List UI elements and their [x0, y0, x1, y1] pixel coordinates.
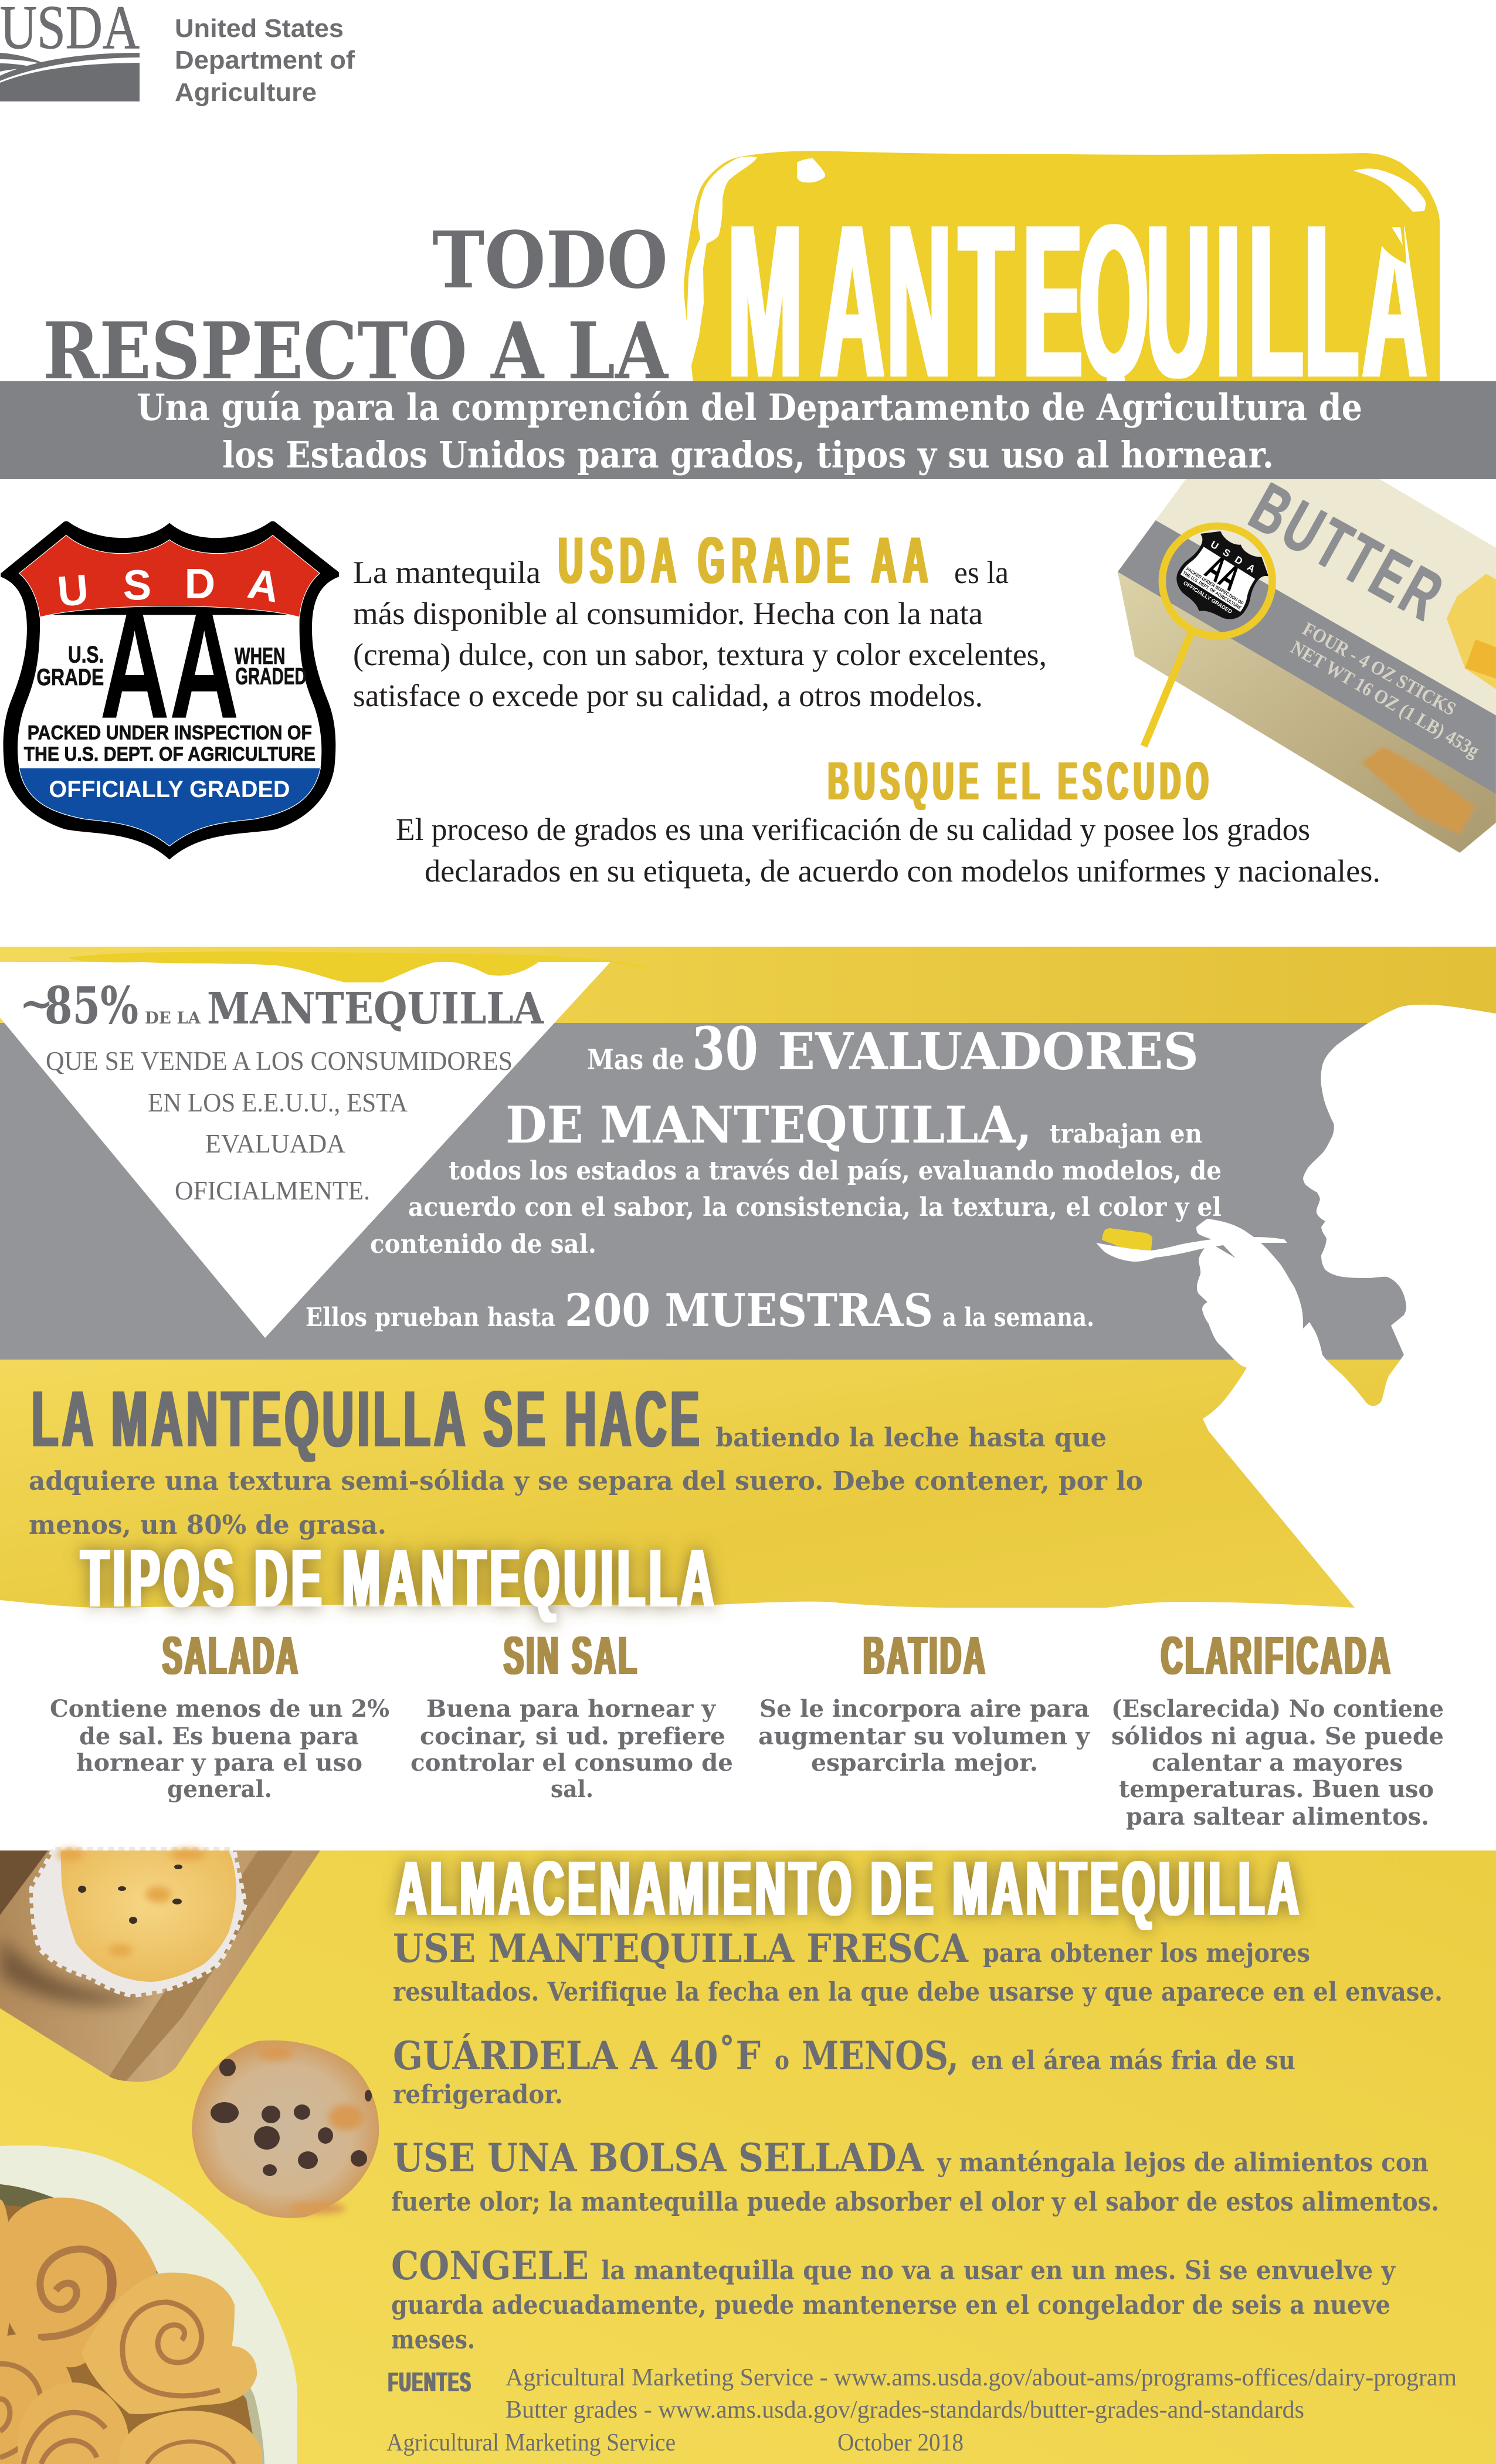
storage tip 4: guarda adecuadamente, puede mantenerse en el congelador de seis a nueve	[391, 2290, 1390, 2320]
storage tip 2	[393, 2033, 1295, 2110]
roll 4	[18, 2382, 129, 2464]
muffin crust browning	[57, 1849, 205, 1956]
roll 2	[82, 2273, 257, 2414]
photo: cookie	[192, 2041, 379, 2218]
type column: batida: esparcirla mejor.	[811, 1749, 1038, 1777]
triangle body text: EVALUADA	[205, 1128, 345, 1158]
evaluators text: Mas de	[587, 1043, 684, 1076]
evaluators text: 200 MUESTRAS	[565, 1284, 933, 1337]
roll 3	[0, 2334, 75, 2464]
shield blue band	[19, 768, 320, 846]
storage tip 3: USE UNA BOLSA SELLADA	[393, 2135, 924, 2181]
butter drip	[69, 952, 649, 982]
storage tip 1: USE MANTEQUILLA FRESCA	[393, 1926, 969, 1971]
type column: salada: Contiene menos de un 2%	[50, 1695, 389, 1723]
shield small text: GRADE	[36, 665, 104, 690]
title	[43, 151, 1440, 423]
sources: Agricultural Marketing Service	[386, 2429, 676, 2456]
mini shield on box: USDA	[1209, 539, 1257, 575]
85 percent statistic: 85%	[45, 975, 138, 1036]
shield USDA letters	[56, 560, 283, 616]
sources: Butter grades - www.ams.usda.gov/grades-standards/butter-grades-and-standards	[506, 2397, 1304, 2424]
shield red band	[19, 535, 320, 617]
type column: clarificada	[1111, 1626, 1444, 1831]
raisins	[78, 1865, 182, 1924]
sources	[386, 2364, 1457, 2456]
butter making text: adquiere una textura semi-sólida y se separa del suero. Debe contener, por lo	[29, 1466, 1143, 1496]
type column: salada: hornear y para el uso	[76, 1749, 362, 1777]
mini shield on box	[1166, 523, 1274, 632]
box weight text: FOUR - 4 OZ STICKS	[1299, 619, 1459, 720]
muffin top	[61, 1850, 236, 1982]
85 percent statistic: ~	[19, 979, 54, 1028]
type column: salada: SALADA	[162, 1626, 300, 1686]
storage tip 2: en el área más fria de su	[971, 2046, 1295, 2076]
type column: clarificada: temperaturas. Buen uso	[1119, 1775, 1434, 1803]
title word: mantequilla: MANTEQUILLA	[728, 180, 1427, 423]
grade AA text block: La mantequila	[353, 555, 541, 590]
butter on spoon	[1102, 1228, 1152, 1250]
evaluators text: 30	[692, 1014, 758, 1083]
muffin liner	[33, 1850, 244, 1994]
USDA grade AA heading: USDA GRADE AA	[558, 524, 935, 597]
storage tip 4: meses.	[391, 2325, 475, 2355]
box grey band	[1118, 520, 1496, 794]
storage tip 4: la mantequilla que no va a usar en un mes. Si se envuelve y	[601, 2256, 1396, 2286]
white triangle callout	[0, 952, 649, 1338]
accent swoosh on last letter	[1379, 226, 1406, 264]
butter box image	[1118, 468, 1496, 853]
type column: sin sal: SIN SAL	[504, 1626, 639, 1686]
sources: October 2018	[837, 2429, 964, 2456]
grade AA text block: es la	[954, 555, 1009, 590]
shield small text	[24, 642, 316, 765]
shield USDA letters: S	[123, 561, 151, 609]
department name: Department of	[175, 46, 355, 74]
butter block shape	[684, 151, 1440, 384]
look for the shield block: El proceso de grados es una verificación de su calidad y posee los grados	[396, 812, 1310, 847]
evaluators text	[306, 1014, 1222, 1337]
grade AA text block: satisface o excede por su calidad, a otros modelos.	[353, 678, 983, 713]
taster silhouette	[1096, 1005, 1496, 1608]
mini shield on box: OFFICIALLY GRADED	[1182, 580, 1233, 615]
box weight text: NET WT 16 OZ (1 LB) 453g	[1287, 637, 1483, 762]
grade AA text block	[353, 524, 1047, 713]
shield small text: GRADED	[235, 663, 307, 689]
type column: clarificada: calentar a mayores	[1152, 1749, 1403, 1777]
type column: clarificada: sólidos ni agua. Se puede	[1111, 1723, 1444, 1750]
storage tip 2: refrigerador.	[393, 2080, 563, 2110]
box top face	[1156, 479, 1496, 717]
grade AA text block: (crema) dulce, con un sabor, textura y color excelentes,	[353, 637, 1047, 672]
sources: Agricultural Marketing Service - www.ams.usda.gov/about-ams/programs-offices/dairy-program	[506, 2364, 1457, 2391]
type column: sin sal: cocinar, si ud. prefiere	[420, 1723, 725, 1750]
evaluators text: todos los estados a través del país, evaluando modelos, de	[449, 1156, 1222, 1186]
shield USDA letters: U	[56, 565, 90, 616]
triangle body text: OFICIALMENTE.	[175, 1175, 370, 1205]
shield AA: AA	[100, 583, 239, 750]
cube reflection	[1362, 747, 1475, 835]
type column: batida: augmentar su volumen y	[758, 1723, 1091, 1750]
department name	[175, 14, 355, 107]
type column: salada: general.	[167, 1775, 272, 1803]
accent mark	[1392, 227, 1403, 245]
type column: sin sal	[411, 1626, 733, 1803]
shield small text: PACKED UNDER INSPECTION OF	[28, 721, 312, 744]
shield white field	[18, 615, 321, 769]
type column: clarificada: (Esclarecida) No contiene	[1111, 1695, 1444, 1723]
type column: salada	[50, 1626, 389, 1803]
evaluators text: DE MANTEQUILLA,	[506, 1096, 1032, 1155]
shield USDA letters: D	[185, 560, 215, 608]
storage tip 4	[391, 2243, 1396, 2355]
type column: clarificada: para saltear alimentos.	[1126, 1803, 1429, 1831]
shield small text: WHEN	[235, 643, 285, 669]
USDA shield	[1, 521, 339, 860]
butter making text: menos, un 80% de grasa.	[29, 1510, 386, 1540]
storage tip 1: para obtener los mejores	[983, 1938, 1310, 1968]
type column: salada: de sal. Es buena para	[79, 1723, 359, 1750]
type column: sin sal: sal.	[551, 1775, 593, 1803]
grey evaluators band	[0, 1023, 1496, 1360]
storage tip 2: GUÁRDELA A 40˚F	[393, 2033, 761, 2079]
evaluators text: Ellos prueban hasta	[306, 1303, 555, 1333]
magnifier ring	[1162, 526, 1273, 636]
title line 1: TODO	[432, 215, 668, 306]
type column: batida: BATIDA	[863, 1626, 988, 1686]
department name: United States	[175, 14, 344, 43]
triangle body text: EN LOS E.E.U.U., ESTA	[148, 1087, 408, 1117]
shield small text: U.S.	[68, 642, 104, 668]
storage tip 2: MENOS,	[802, 2033, 959, 2079]
grade AA text block: más disponible al consumidor. Hecha con la nata	[353, 596, 983, 631]
logo field symbol	[0, 53, 140, 101]
evaluators text: EVALUADORES	[778, 1022, 1199, 1082]
type column: sin sal: Buena para hornear y	[426, 1695, 717, 1723]
roll 1	[3, 2198, 157, 2367]
photo: cinnamon rolls bowl	[0, 2146, 297, 2464]
shield officially graded: OFFICIALLY GRADED	[49, 777, 290, 802]
filling between rolls	[0, 2205, 258, 2464]
storage tip 3	[391, 2135, 1439, 2217]
type column: batida	[758, 1626, 1091, 1777]
storage tip 1	[393, 1926, 1443, 2007]
types section white wave	[0, 1600, 1496, 1853]
department name: Agriculture	[175, 78, 317, 107]
types heading: TIPOS DE MANTEQUILLA	[81, 1532, 718, 1624]
mini shield on box: THE U.S. DEPT. OF AGRICULTURE	[1182, 570, 1243, 611]
box front face	[1118, 572, 1496, 853]
roll 5	[119, 2411, 262, 2464]
USDA logo	[0, 0, 355, 107]
triangle body text: QUE SE VENDE A LOS CONSUMIDORES	[46, 1046, 513, 1076]
butter making text	[29, 1374, 1143, 1540]
triangle body text	[46, 1046, 513, 1205]
yellow background: butter making section	[0, 1360, 1496, 1608]
subtitle band: los Estados Unidos para grados, tipos y su uso al hornear.	[222, 433, 1274, 476]
subtitle band: Una guía para la comprención del Departamento de Agricultura de	[137, 386, 1362, 429]
storage tip 4: CONGELE	[391, 2243, 589, 2289]
bowl inner	[0, 2184, 264, 2464]
butter making heading: LA MANTEQUILLA SE HACE	[32, 1374, 703, 1463]
gap in hand	[1216, 1245, 1236, 1258]
butter making text: batiendo la leche hasta que	[715, 1423, 1107, 1453]
roll 6	[0, 2199, 12, 2352]
85 percent statistic: DE LA	[145, 1008, 201, 1028]
storage tip 3: y manténgala lejos de alimientos con	[937, 2148, 1429, 2178]
evaluators text: trabajan en	[1050, 1119, 1202, 1149]
storage tip 2: o	[775, 2046, 789, 2076]
shield small text: THE U.S. DEPT. OF AGRICULTURE	[24, 743, 316, 765]
mini shield on box: AA	[1199, 548, 1247, 598]
shield USDA letters: A	[245, 560, 283, 612]
evaluators text: a la semana.	[942, 1303, 1094, 1333]
storage section background	[0, 1850, 1496, 2464]
evaluators text: contenido de sal.	[370, 1229, 596, 1259]
type column: sin sal: controlar el consumo de	[411, 1749, 733, 1777]
shield black outline	[1, 521, 339, 860]
subtitle band	[0, 381, 1496, 479]
bowl rim	[0, 2146, 297, 2464]
butter cubes on box	[1447, 574, 1496, 689]
title line 2: RESPECTO A LA	[43, 306, 669, 397]
sources: FUENTES	[388, 2367, 472, 2397]
type column: batida: Se le incorpora aire para	[759, 1695, 1090, 1723]
85 percent statistic: MANTEQUILLA	[207, 984, 544, 1034]
85 percent statistic	[19, 975, 544, 1036]
look for the shield block	[396, 751, 1380, 889]
mini shield on box: PACKED UNDER INSPECTION OF	[1185, 567, 1244, 606]
photo: muffin on board	[0, 1849, 320, 2082]
yellow background: middle section	[0, 947, 1496, 1023]
look for the shield block: declarados en su etiqueta, de acuerdo con modelos uniformes y nacionales.	[425, 853, 1380, 889]
evaluators text: acuerdo con el sabor, la consistencia, la textura, el color y el	[408, 1192, 1222, 1222]
magnifier handle	[1144, 633, 1191, 746]
